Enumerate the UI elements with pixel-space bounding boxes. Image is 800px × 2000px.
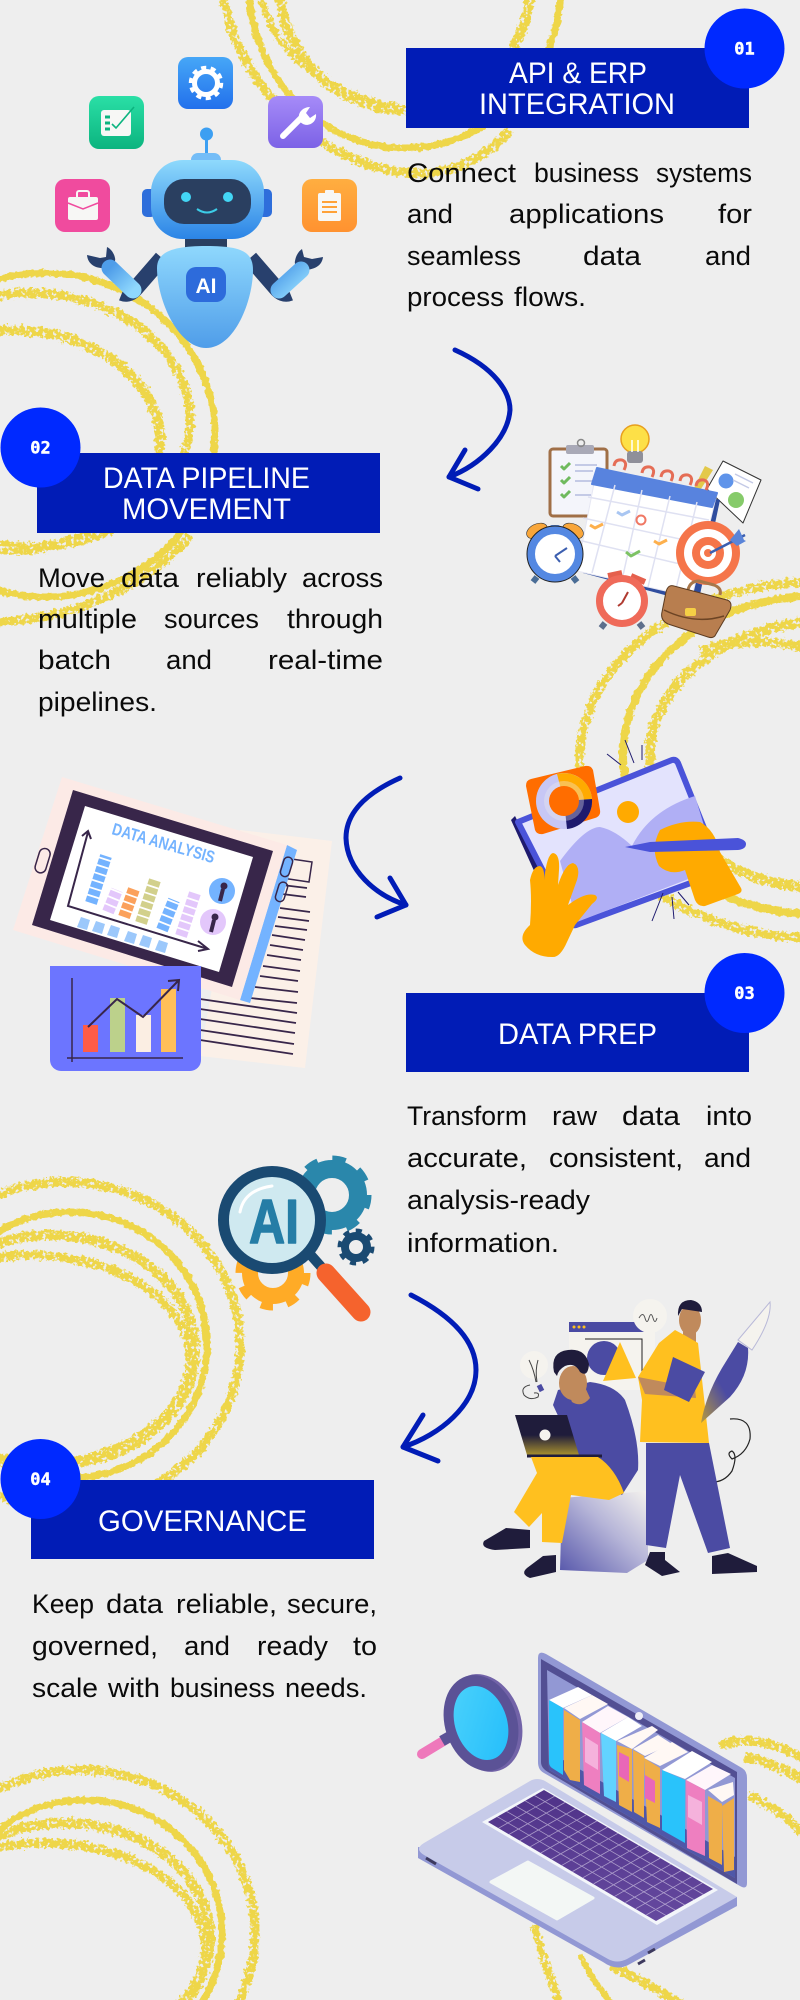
briefcase (662, 581, 731, 638)
heading bar 3: DATA PREP (498, 1018, 657, 1051)
robot arms (87, 247, 323, 294)
seated person (483, 1350, 638, 1578)
light bulb (621, 425, 649, 463)
heading bar 1: API & ERP (509, 57, 647, 90)
robot body with AI badge: AI (196, 275, 216, 298)
idea bubbles and doodles (520, 1299, 750, 1482)
body text 2: across (302, 563, 383, 593)
icon: pink briefcase tile (55, 179, 110, 232)
body text 1: and (407, 199, 453, 229)
calendar (577, 460, 720, 604)
body text 4: needs. (285, 1673, 367, 1703)
tablet device: DATA ANALYSIS (110, 820, 217, 867)
cube seat (560, 1491, 648, 1573)
number badge 01: 01 (734, 40, 755, 60)
body text 4: Keep (32, 1589, 94, 1619)
body text 2: pipelines. (38, 687, 157, 717)
number badge 04 (0, 1439, 80, 1519)
blue alarm clock (524, 520, 586, 582)
body text 3: into (706, 1101, 752, 1131)
body text 4: with (107, 1673, 160, 1703)
magnifying lens (308, 1252, 324, 1270)
design window (569, 1322, 655, 1390)
arrow 3 (403, 1295, 476, 1461)
heading bar 2: MOVEMENT (122, 493, 291, 526)
body text 1: and (705, 241, 751, 271)
illustration: AI magnifier with gears (224, 1160, 372, 1312)
arrow 1 (449, 350, 510, 489)
laptop base (418, 1779, 737, 1968)
heading bar 3 (406, 993, 749, 1072)
body text 2: real-time (268, 645, 383, 675)
heading bar 4: GOVERNANCE (98, 1505, 307, 1538)
body text 1: for (718, 199, 752, 229)
laptop screen with books (538, 1653, 747, 1887)
body text 3: data (622, 1101, 681, 1131)
heading bar 1: INTEGRATION (479, 88, 675, 121)
spark lines (607, 740, 689, 921)
number badge 02 (0, 408, 80, 488)
section 4: Governance (0, 1439, 377, 1703)
body text 3: raw (552, 1101, 598, 1131)
illustration: laptop with books and magnifier (418, 1653, 747, 1968)
body text 4: ready (257, 1631, 329, 1661)
number badge 01 (704, 8, 784, 88)
heading bar 2: DATA PIPELINE (103, 462, 310, 495)
illustration: AI magnifier with gears: AI (249, 1188, 299, 1257)
robot body with AI badge (157, 236, 253, 348)
body text 2: and (166, 645, 212, 675)
body text 2: reliably (196, 563, 288, 593)
body text 3: Transform (407, 1101, 527, 1131)
section 1: API & ERP integration (406, 8, 784, 312)
body text 4: to (353, 1631, 377, 1661)
body text 4 (32, 1589, 377, 1703)
body text 1: seamless (407, 241, 521, 271)
body text 4: scale (32, 1673, 98, 1703)
body text 1: Connect (407, 158, 517, 188)
red alarm clock (600, 573, 645, 628)
printed report page (200, 830, 332, 1068)
standing person with pen nib (638, 1300, 770, 1576)
heading bar 1 (406, 48, 749, 128)
body text 1: flows. (514, 282, 586, 312)
body text 4: data (106, 1589, 164, 1619)
illustration: hands drawing on tablet (511, 740, 746, 957)
target with dart (676, 521, 746, 585)
body text 2: batch (38, 645, 111, 675)
body text 3 (407, 1101, 752, 1258)
body text 3: information. (407, 1228, 559, 1258)
number badge 02: 02 (30, 438, 51, 458)
body text 4: business (170, 1673, 275, 1703)
section 2: Data pipeline movement (0, 408, 383, 717)
arrow 2 (346, 778, 406, 917)
body text 2: sources (164, 604, 259, 634)
body text 1: systems (656, 158, 752, 188)
body text 3: accurate, (407, 1143, 527, 1173)
body text 3: and (704, 1143, 751, 1173)
right hand with stylus (655, 822, 742, 906)
body text 4: and (184, 1631, 230, 1661)
number badge 04: 04 (30, 1470, 51, 1490)
body text 4: governed, (32, 1631, 158, 1661)
icon: green checklist tile (89, 96, 144, 149)
body text 2: Move (38, 563, 105, 593)
icon: orange clipboard tile (302, 179, 357, 232)
clipboard (550, 440, 607, 516)
illustration: data analysis tablet and charts (13, 777, 332, 1071)
body text 2: multiple (38, 604, 137, 634)
body text 3: consistent, (549, 1143, 683, 1173)
section 3: Data prep (406, 953, 784, 1258)
illustration: planning calendar cluster (524, 425, 761, 638)
row of books (549, 1687, 734, 1872)
gears (240, 1160, 372, 1306)
body text 1 (407, 158, 752, 312)
heading bar 2 (37, 453, 380, 533)
number badge 03 (704, 953, 784, 1033)
icon: purple wrench tile (268, 96, 323, 148)
robot head (142, 128, 272, 239)
purple bar chart card (50, 966, 201, 1071)
body text 2 (38, 563, 383, 717)
tablet device (13, 777, 297, 1003)
body text 4: reliable, (176, 1589, 277, 1619)
number badge 03: 03 (734, 984, 755, 1004)
body text 1: business (534, 158, 639, 188)
body text 4: secure, (287, 1589, 377, 1619)
left hand (522, 853, 597, 957)
body text 1: applications (509, 199, 664, 229)
body text 3: analysis-ready (407, 1185, 591, 1215)
body text 2: data (121, 563, 180, 593)
body text 1: process (407, 282, 504, 312)
illustration: AI robot with app icons (55, 57, 357, 348)
side note (694, 461, 761, 523)
body text 1: data (583, 241, 642, 271)
illustration: two people working (483, 1299, 770, 1578)
body text 2: through (287, 604, 383, 634)
orange donut chart tile (526, 766, 600, 834)
heading bar 4 (31, 1480, 374, 1559)
magnifying glass (422, 1664, 535, 1782)
icon: settings gear tile (178, 57, 233, 109)
